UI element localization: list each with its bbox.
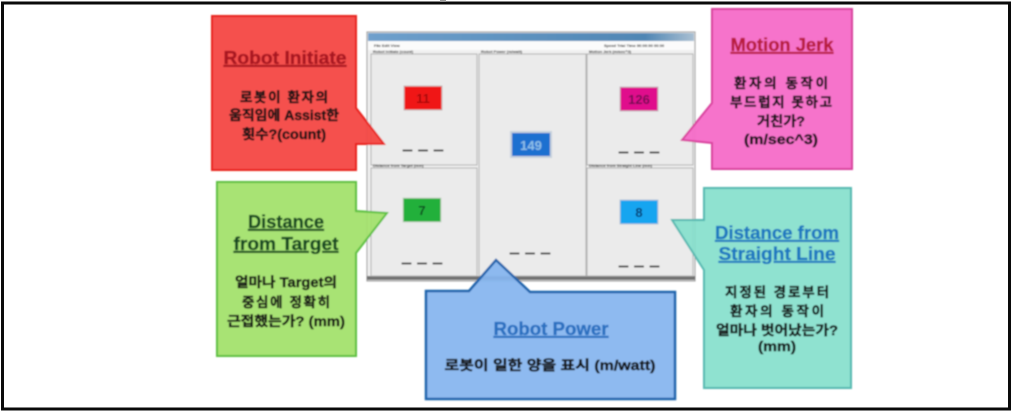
text: distance from straight line description: (mm) bbox=[758, 339, 796, 354]
window menu bar: File Edit View bbox=[374, 43, 401, 48]
window menu bar: Speed Trial Time 00:00:00 00:00 bbox=[604, 43, 665, 48]
callout: distance from straight line bbox=[672, 188, 851, 388]
panel: distance from straight line bbox=[587, 163, 693, 276]
heading: motion jerk: Motion Jerk bbox=[730, 34, 834, 55]
callout: distance from target bbox=[217, 182, 387, 356]
text: motion jerk description: 환자의 동작이 bbox=[734, 76, 828, 91]
heading: distance from target: from Target bbox=[234, 233, 338, 254]
panel: robot power bbox=[479, 49, 586, 276]
panel: distance from straight line: — — — bbox=[619, 261, 659, 271]
heading: distance from target bbox=[234, 211, 338, 254]
text: distance from straight line description: 얼마나 벗어났는가? bbox=[716, 323, 838, 338]
text: distance from target description: 중심에 정확히 bbox=[242, 294, 330, 310]
value: green: 7 bbox=[418, 203, 426, 218]
panel: motion jerk: — — — bbox=[619, 147, 659, 157]
value: cyan: 8 bbox=[635, 205, 643, 220]
top edge mark bbox=[440, 0, 446, 2]
panel: robot initiate: — — — bbox=[403, 145, 443, 155]
text: distance from target description: 얼마나 Target의 bbox=[235, 275, 337, 290]
panel: motion jerk bbox=[587, 49, 693, 165]
panel: distance from target: Distance from Target (mm) bbox=[373, 163, 424, 168]
heading: distance from straight line: Distance from bbox=[715, 222, 839, 243]
value: blue bbox=[511, 132, 551, 157]
value: blue: 149 bbox=[520, 138, 542, 153]
panel: motion jerk: Motion Jerk (m/sec^3) bbox=[589, 49, 632, 54]
panel: distance from target: — — — bbox=[402, 258, 442, 268]
text: distance from straight line description: 환자의 동작이 bbox=[730, 304, 824, 319]
value: magenta: 126 bbox=[628, 92, 650, 107]
text: motion jerk description: 부드럽지 못하고 bbox=[730, 95, 832, 110]
text: distance from straight line description bbox=[716, 285, 838, 354]
value: red: 11 bbox=[416, 91, 430, 106]
text: robot initiate description: 움직임에 Assist한 bbox=[229, 108, 340, 123]
panel: robot power: — — — bbox=[510, 248, 550, 258]
text: distance from straight line description: 지정된 경로부터 bbox=[725, 285, 829, 300]
text: robot power description: 로봇이 일한 양을 표시 (m/watt) bbox=[444, 358, 656, 373]
heading: robot power: Robot Power bbox=[494, 318, 608, 339]
text: distance from target description: 근접했는가? (mm) bbox=[227, 314, 345, 329]
text: motion jerk description: (m/sec^3) bbox=[744, 132, 818, 147]
heading: distance from straight line bbox=[715, 222, 839, 264]
panel: robot power: Robot Power (m/watt) bbox=[481, 49, 523, 54]
panel: robot initiate bbox=[371, 49, 477, 165]
window title bar bbox=[368, 33, 694, 41]
text: distance from target description bbox=[227, 275, 345, 329]
text: robot initiate description: 횟수?(count) bbox=[242, 126, 326, 142]
heading: robot initiate: Robot Initiate bbox=[224, 47, 346, 68]
text: robot initiate description: 로봇이 환자의 bbox=[240, 90, 328, 105]
panel: distance from straight line: Distance from Straight Line (mm) bbox=[589, 163, 653, 168]
text: motion jerk description: 거친가? bbox=[757, 114, 805, 129]
heading: distance from straight line: Straight Line bbox=[718, 243, 836, 264]
heading: distance from target: Distance bbox=[248, 211, 324, 232]
callout: robot initiate bbox=[212, 16, 384, 170]
window menu bar bbox=[368, 41, 694, 50]
text: robot initiate description bbox=[229, 90, 340, 142]
software window bbox=[367, 32, 695, 281]
panel: distance from target bbox=[371, 163, 477, 276]
callout: robot power bbox=[426, 260, 675, 399]
text: motion jerk description bbox=[730, 76, 832, 147]
panel: robot initiate: Robot Initiate (count) bbox=[373, 49, 414, 54]
callout: motion jerk bbox=[682, 9, 852, 169]
